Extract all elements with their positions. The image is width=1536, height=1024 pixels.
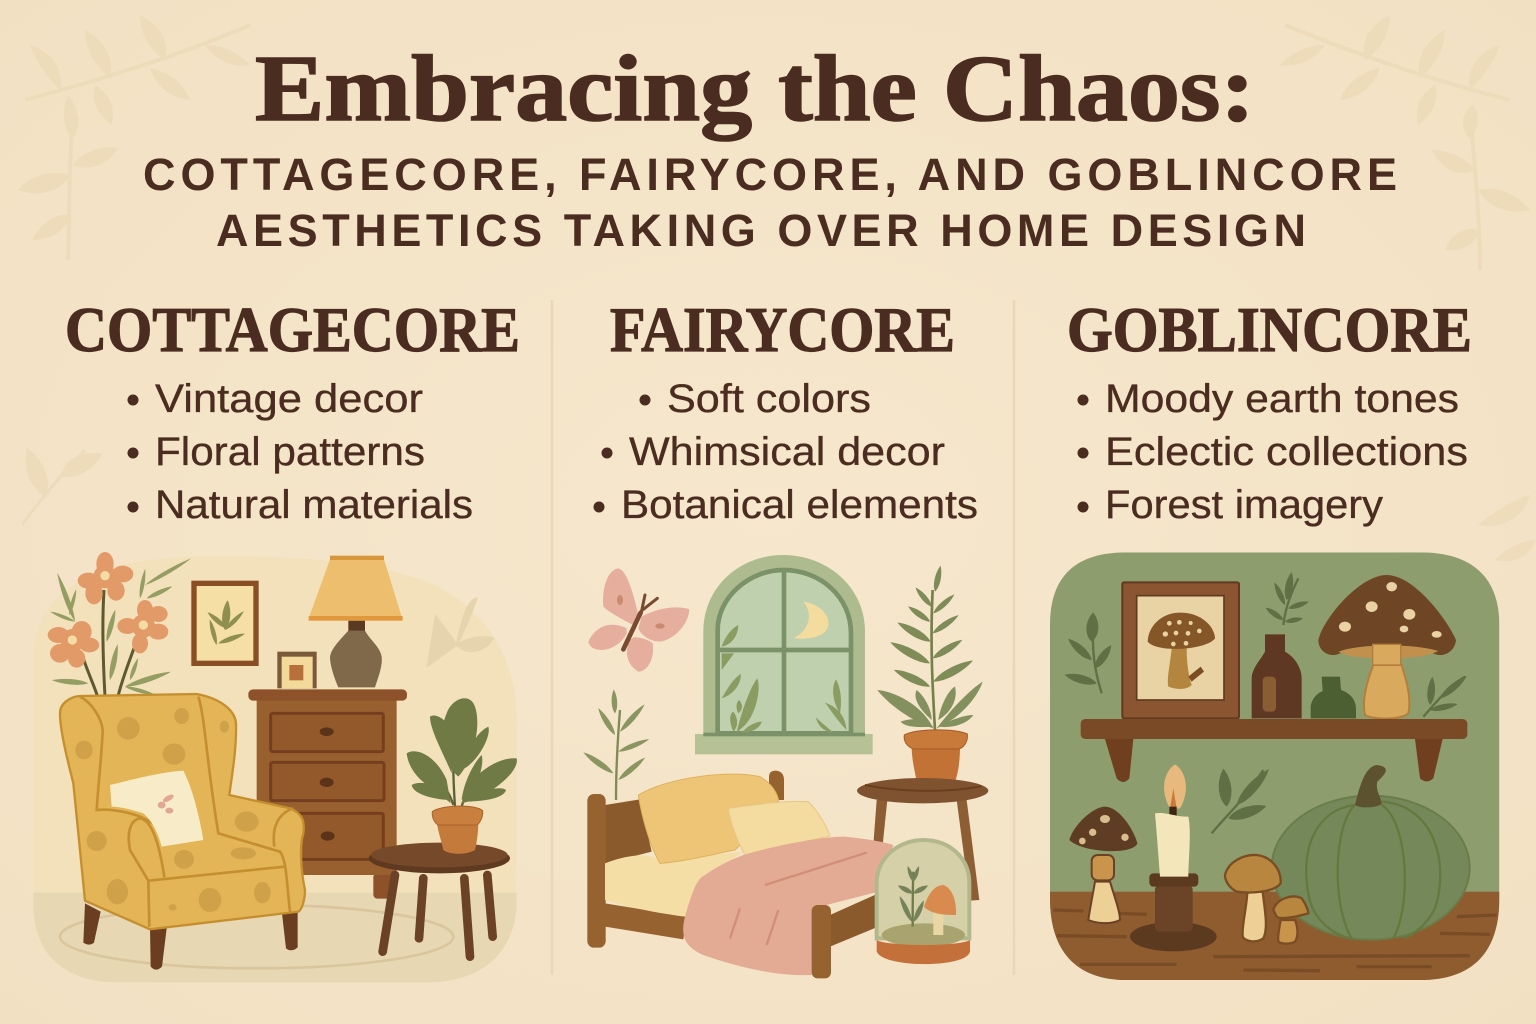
- list: fairycore: Soft colors: [667, 377, 871, 421]
- icon: small photo frame: [277, 652, 317, 688]
- list: fairycore: Botanical elements: [621, 483, 978, 527]
- icon: table lamp: [309, 556, 403, 687]
- list: cottagecore: Vintage decor: [155, 377, 423, 421]
- icon: potted plant: [407, 698, 517, 854]
- column dividers: [552, 300, 1014, 975]
- icon: framed mushroom picture: [1122, 582, 1239, 718]
- title: Embracing the Chaos:: [255, 37, 1255, 141]
- icon: butterfly: [588, 568, 689, 672]
- icon: framed botanical picture: [194, 583, 256, 663]
- background leaves: [18, 15, 1536, 561]
- icon: small mushrooms: [1225, 855, 1308, 944]
- icon: candle in holder: [1130, 764, 1217, 951]
- subtitle: COTTAGECORE, FAIRYCORE, AND GOBLINCORE: [143, 149, 1397, 200]
- icon: yellow armchair: [60, 694, 305, 970]
- list: cottagecore: [128, 377, 473, 527]
- icon: large spotted mushroom: [1318, 575, 1456, 719]
- list: goblincore: [1078, 377, 1468, 527]
- subtitle: AESTHETICS TAKING OVER HOME DESIGN: [216, 205, 1306, 256]
- icon: dresser: [248, 689, 407, 899]
- panel: goblincore shelf illustration: [1040, 545, 1510, 985]
- panel: cottagecore room illustration: [30, 550, 530, 993]
- heading: cottagecore: COTTAGECORE: [65, 295, 520, 365]
- list: goblincore: Moody earth tones: [1105, 377, 1459, 421]
- icon: bed: [587, 771, 893, 978]
- heading: goblincore: GOBLINCORE: [1067, 295, 1472, 365]
- panel: fairycore bedroom illustration: [582, 555, 988, 978]
- icon: green pumpkin: [1272, 765, 1470, 940]
- icon: wall leaves: [1063, 571, 1469, 833]
- icon: wooden shelf: [1081, 719, 1467, 782]
- list: cottagecore: Natural materials: [155, 483, 473, 527]
- icon: fern in pot: [877, 565, 983, 785]
- icon: left plant: [582, 689, 650, 800]
- icon: glass terrarium: [877, 840, 970, 964]
- icon: flowers: [48, 552, 192, 697]
- list: cottagecore: Floral patterns: [155, 430, 425, 474]
- icon: mushroom left: [1069, 807, 1137, 923]
- icon: small green bottle: [1311, 677, 1356, 718]
- icon: brown bottle: [1252, 634, 1302, 718]
- subtitle: [143, 149, 1397, 256]
- heading: fairycore: FAIRYCORE: [610, 295, 955, 365]
- icon: round side table: [369, 843, 510, 957]
- list: fairycore: Whimsical decor: [629, 430, 945, 474]
- list: goblincore: Eclectic collections: [1105, 430, 1468, 474]
- icon: arched window: [695, 555, 873, 754]
- icon: side table: [857, 778, 988, 901]
- list: fairycore: [594, 377, 978, 527]
- list: goblincore: Forest imagery: [1105, 483, 1383, 527]
